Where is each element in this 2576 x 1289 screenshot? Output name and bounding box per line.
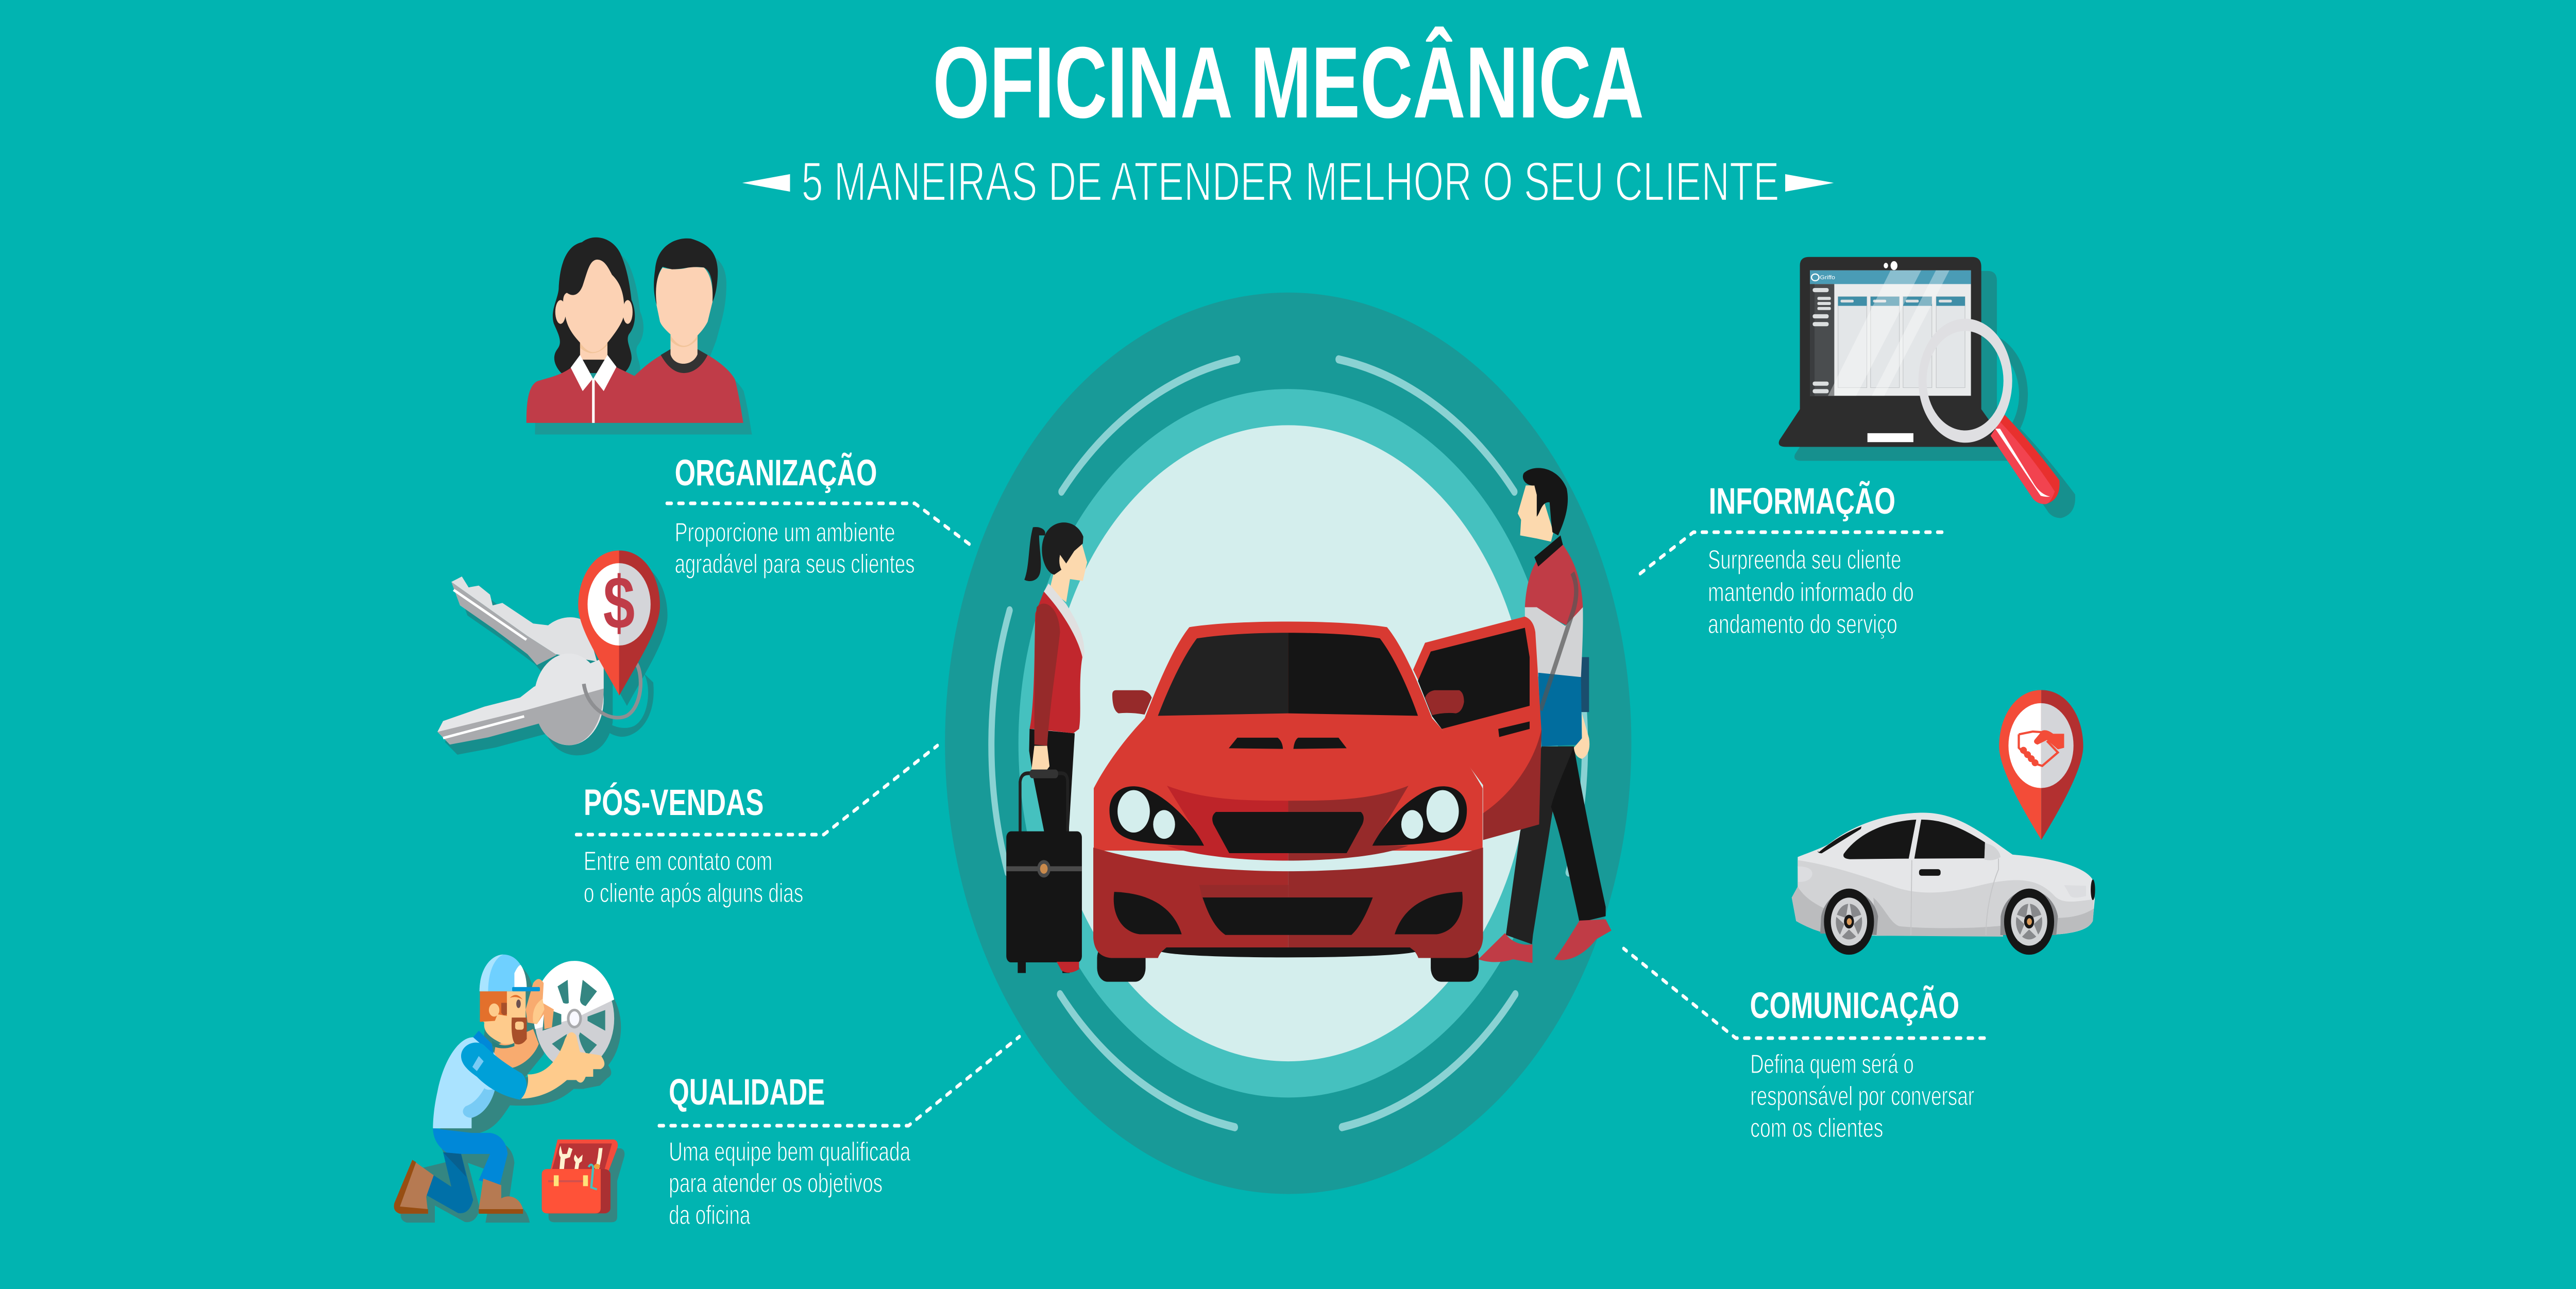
connector line: informação	[1638, 532, 1942, 575]
text: informação: Surpreenda seu cliente	[1708, 545, 1901, 574]
heading: organização: ORGANIZAÇÃO	[675, 452, 877, 494]
text: qualidade	[669, 1137, 910, 1230]
heading: pós-vendas: PÓS-VENDAS	[584, 783, 764, 823]
text: pós-vendas: Entre em contato com	[584, 846, 772, 876]
heading: informação: INFORMAÇÃO	[1709, 481, 1895, 522]
panel: comunicação	[1623, 948, 1985, 1143]
icon: mechanic with wheel and toolbox	[394, 955, 624, 1223]
woman with suitcase	[1006, 522, 1087, 973]
subtitle with arrows: 5 MANEIRAS DE ATENDER MELHOR O SEU CLIENTE	[802, 151, 1780, 213]
icon: car keys with dollar pin: $	[603, 561, 635, 645]
text: comunicação: Defina quem será o	[1750, 1049, 1914, 1079]
text: informação	[1708, 545, 1914, 639]
heading: qualidade: QUALIDADE	[669, 1072, 825, 1113]
text: informação: andamento do serviço	[1708, 609, 1897, 639]
icon: car keys with dollar pin	[437, 551, 668, 755]
text: qualidade: para atender os objetivos	[669, 1168, 883, 1198]
icon: couple of clients	[527, 238, 752, 434]
text: qualidade: Uma equipe bem qualificada	[669, 1137, 910, 1166]
man walking	[1478, 468, 1612, 963]
text: comunicação: com os clientes	[1750, 1113, 1883, 1143]
connector line: qualidade	[659, 1037, 1020, 1126]
icon: silver car with handshake pin	[1792, 690, 2095, 955]
text: pós-vendas	[584, 846, 803, 908]
text: pós-vendas: o cliente após alguns dias	[584, 878, 803, 908]
panel: informação	[1638, 481, 1942, 639]
text: organização: Proporcione um ambiente	[675, 517, 895, 547]
central circle with car and people	[945, 293, 1631, 1194]
icon: laptop with magnifying glass: Griffo	[1820, 275, 1835, 281]
text: comunicação	[1750, 1049, 1974, 1143]
connector line: pós-vendas	[576, 745, 938, 835]
text: informação: mantendo informado do	[1708, 577, 1914, 607]
connector line: organização	[667, 503, 972, 546]
panel: qualidade	[659, 1037, 1020, 1230]
text: comunicação: responsável por conversar	[1750, 1081, 1974, 1111]
heading: comunicação: COMUNICAÇÃO	[1750, 985, 1959, 1026]
title: OFICINA MECÂNICA	[933, 26, 1644, 140]
icon: laptop with magnifying glass	[1779, 257, 2075, 518]
connector line: comunicação	[1623, 948, 1985, 1038]
red car front view	[1093, 617, 1541, 982]
text: qualidade: da oficina	[669, 1200, 751, 1230]
text: organização	[675, 517, 915, 579]
panel: pós-vendas	[576, 745, 938, 908]
text: organização: agradável para seus clientes	[675, 549, 915, 579]
panel: organização	[667, 452, 972, 579]
